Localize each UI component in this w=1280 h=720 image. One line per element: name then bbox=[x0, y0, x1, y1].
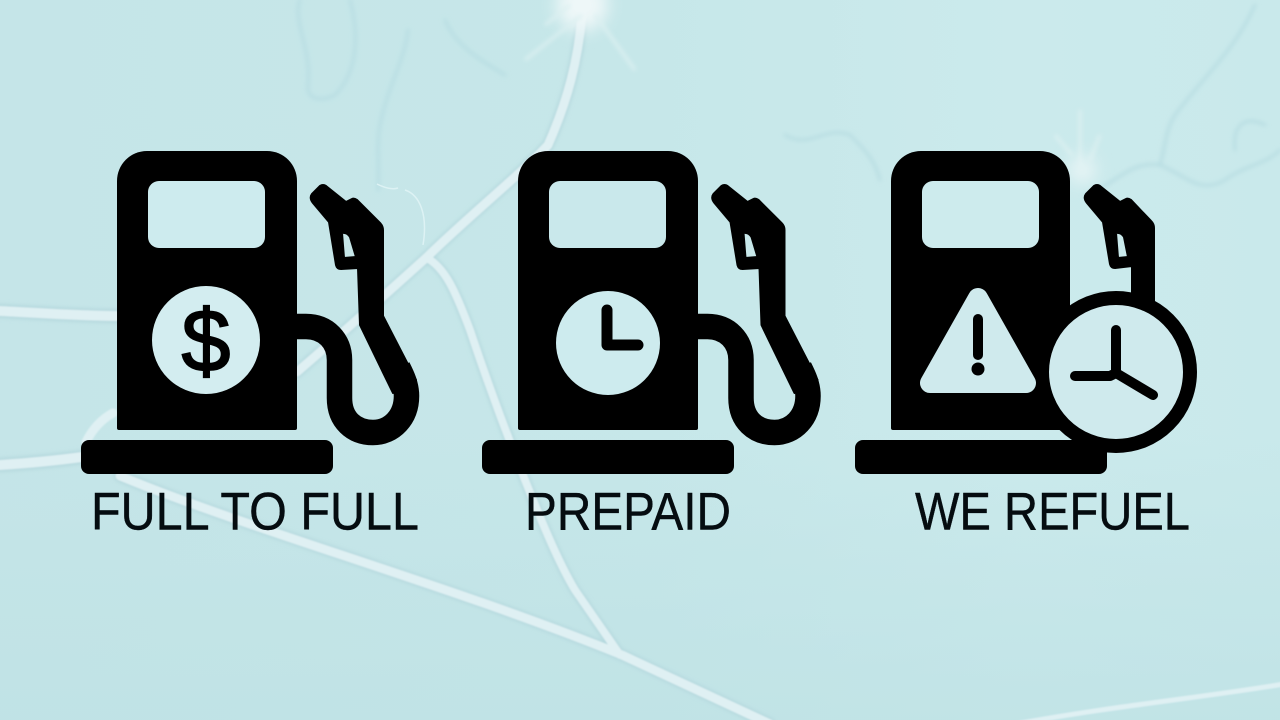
icon: fuel hose and nozzle bbox=[295, 185, 416, 432]
icon: pump body bbox=[117, 151, 297, 430]
icon: pump base bbox=[482, 440, 734, 474]
icon: large clock bbox=[1042, 298, 1190, 446]
panel: full to full pump bbox=[81, 151, 419, 542]
icon: dollar coin: $ bbox=[182, 291, 230, 390]
icon: pump screen bbox=[549, 181, 666, 248]
icon: dollar coin bbox=[152, 286, 260, 394]
icon: fuel hose and nozzle bbox=[696, 185, 818, 432]
icon: pump base bbox=[855, 440, 1107, 474]
panel: we refuel pump bbox=[855, 151, 1190, 542]
icon: warning triangle bbox=[930, 298, 1026, 383]
icon: nozzle bbox=[1085, 185, 1154, 320]
icon: pump screen bbox=[148, 181, 265, 248]
label: full to full: FULL TO FULL bbox=[91, 482, 419, 542]
panel: prepaid pump bbox=[482, 151, 818, 542]
label: prepaid: PREPAID bbox=[525, 482, 731, 542]
icon: pump base bbox=[81, 440, 333, 474]
label: we refuel: WE REFUEL bbox=[915, 482, 1190, 542]
icon: clock face bbox=[556, 291, 660, 395]
icon: pump screen bbox=[922, 181, 1039, 248]
icon: pump body bbox=[518, 151, 698, 430]
icon: pump body bbox=[891, 151, 1070, 430]
